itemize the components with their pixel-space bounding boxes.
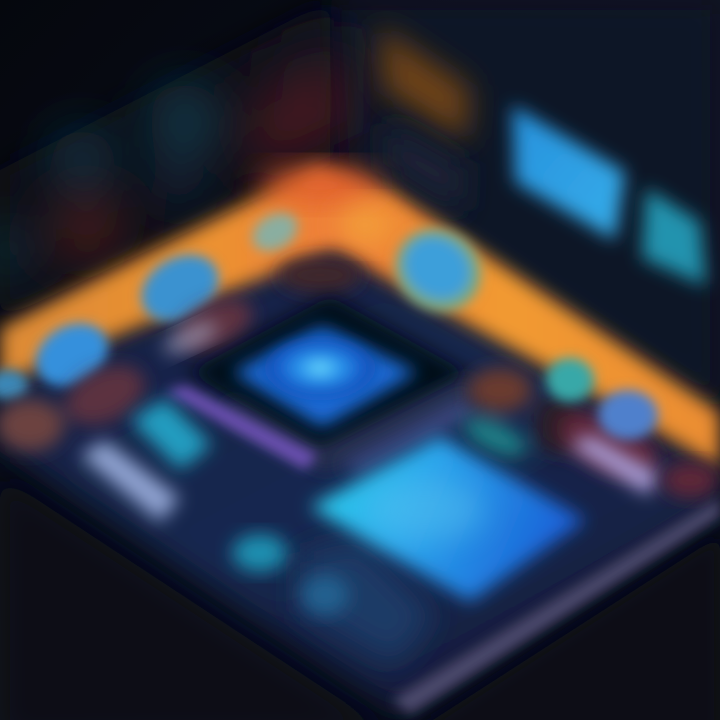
icon: central bright core (258, 334, 382, 402)
icon: dark red card (250, 65, 350, 175)
icon: brown block (468, 368, 532, 412)
icon: teal bubble right (546, 358, 594, 402)
icon: maroon shape 1 (169, 288, 261, 362)
panel: right back wall (330, 0, 720, 410)
highlight: big panel glow (365, 478, 485, 542)
icon: dark wall card under orange (385, 120, 465, 215)
icon: small oval on band (246, 205, 304, 259)
icon: faded blue card (152, 158, 204, 202)
icon: blue card upper (129, 242, 231, 334)
panel: orange band (0, 166, 720, 468)
panel: central dark diamond (188, 296, 470, 452)
icon: teal strip (458, 410, 532, 464)
icon: teal card left floor (130, 398, 212, 470)
icon: faded teal card (149, 82, 221, 158)
panel: floor (0, 240, 720, 712)
icon: dark figure (534, 395, 586, 455)
panel: left back wall (0, 0, 330, 320)
highlight: yellow patch on band (337, 205, 393, 245)
strip: dark slab under diamond (225, 378, 478, 470)
icon: pale highlight card (158, 315, 222, 361)
icon: small blue edge card (0, 370, 28, 400)
icon: bright blue wall panel (512, 105, 625, 240)
icon: central blue glow (232, 326, 418, 428)
strip: bottom floor edge (392, 498, 720, 714)
highlight: red corner of band (258, 167, 382, 203)
icon: teal wall panel (642, 188, 706, 286)
strip: bottom right floor shadow (425, 535, 720, 720)
icon: pale list card (80, 440, 180, 522)
strip: purple bar (165, 385, 318, 470)
icon: blue bubble right (598, 390, 658, 440)
icon: dark brown centre top (278, 257, 362, 293)
group: left cards on floor edge (0, 242, 231, 400)
icon: maroon block (552, 399, 668, 491)
icon: small teal blob (232, 534, 288, 572)
icon: pale lavender card (570, 435, 660, 495)
icon: faded teal card far left (0, 224, 24, 276)
group: maroon figures below left cards (0, 257, 362, 451)
strip: purple right bar (340, 398, 475, 475)
panel: large cyan-blue panel (310, 436, 586, 602)
icon: maroon shape 2 (56, 354, 154, 436)
icon: small blue blob (301, 575, 349, 615)
panel: lower slate panel (300, 540, 435, 665)
icon: brown shape 3 (0, 399, 64, 451)
icon: red block far right (662, 462, 718, 498)
icon: faded orange wall card (378, 26, 470, 142)
icon: faded dark card top (265, 20, 350, 95)
icon: faded teal card (50, 128, 114, 188)
strip: bottom left floor shadow (0, 475, 395, 720)
group: right cluster on floor (458, 368, 668, 491)
group: faded left wall cards (0, 20, 350, 276)
icon: blue card lower (25, 311, 119, 399)
icon: faded red card (52, 200, 124, 260)
icon: oval on band centre (379, 212, 497, 328)
